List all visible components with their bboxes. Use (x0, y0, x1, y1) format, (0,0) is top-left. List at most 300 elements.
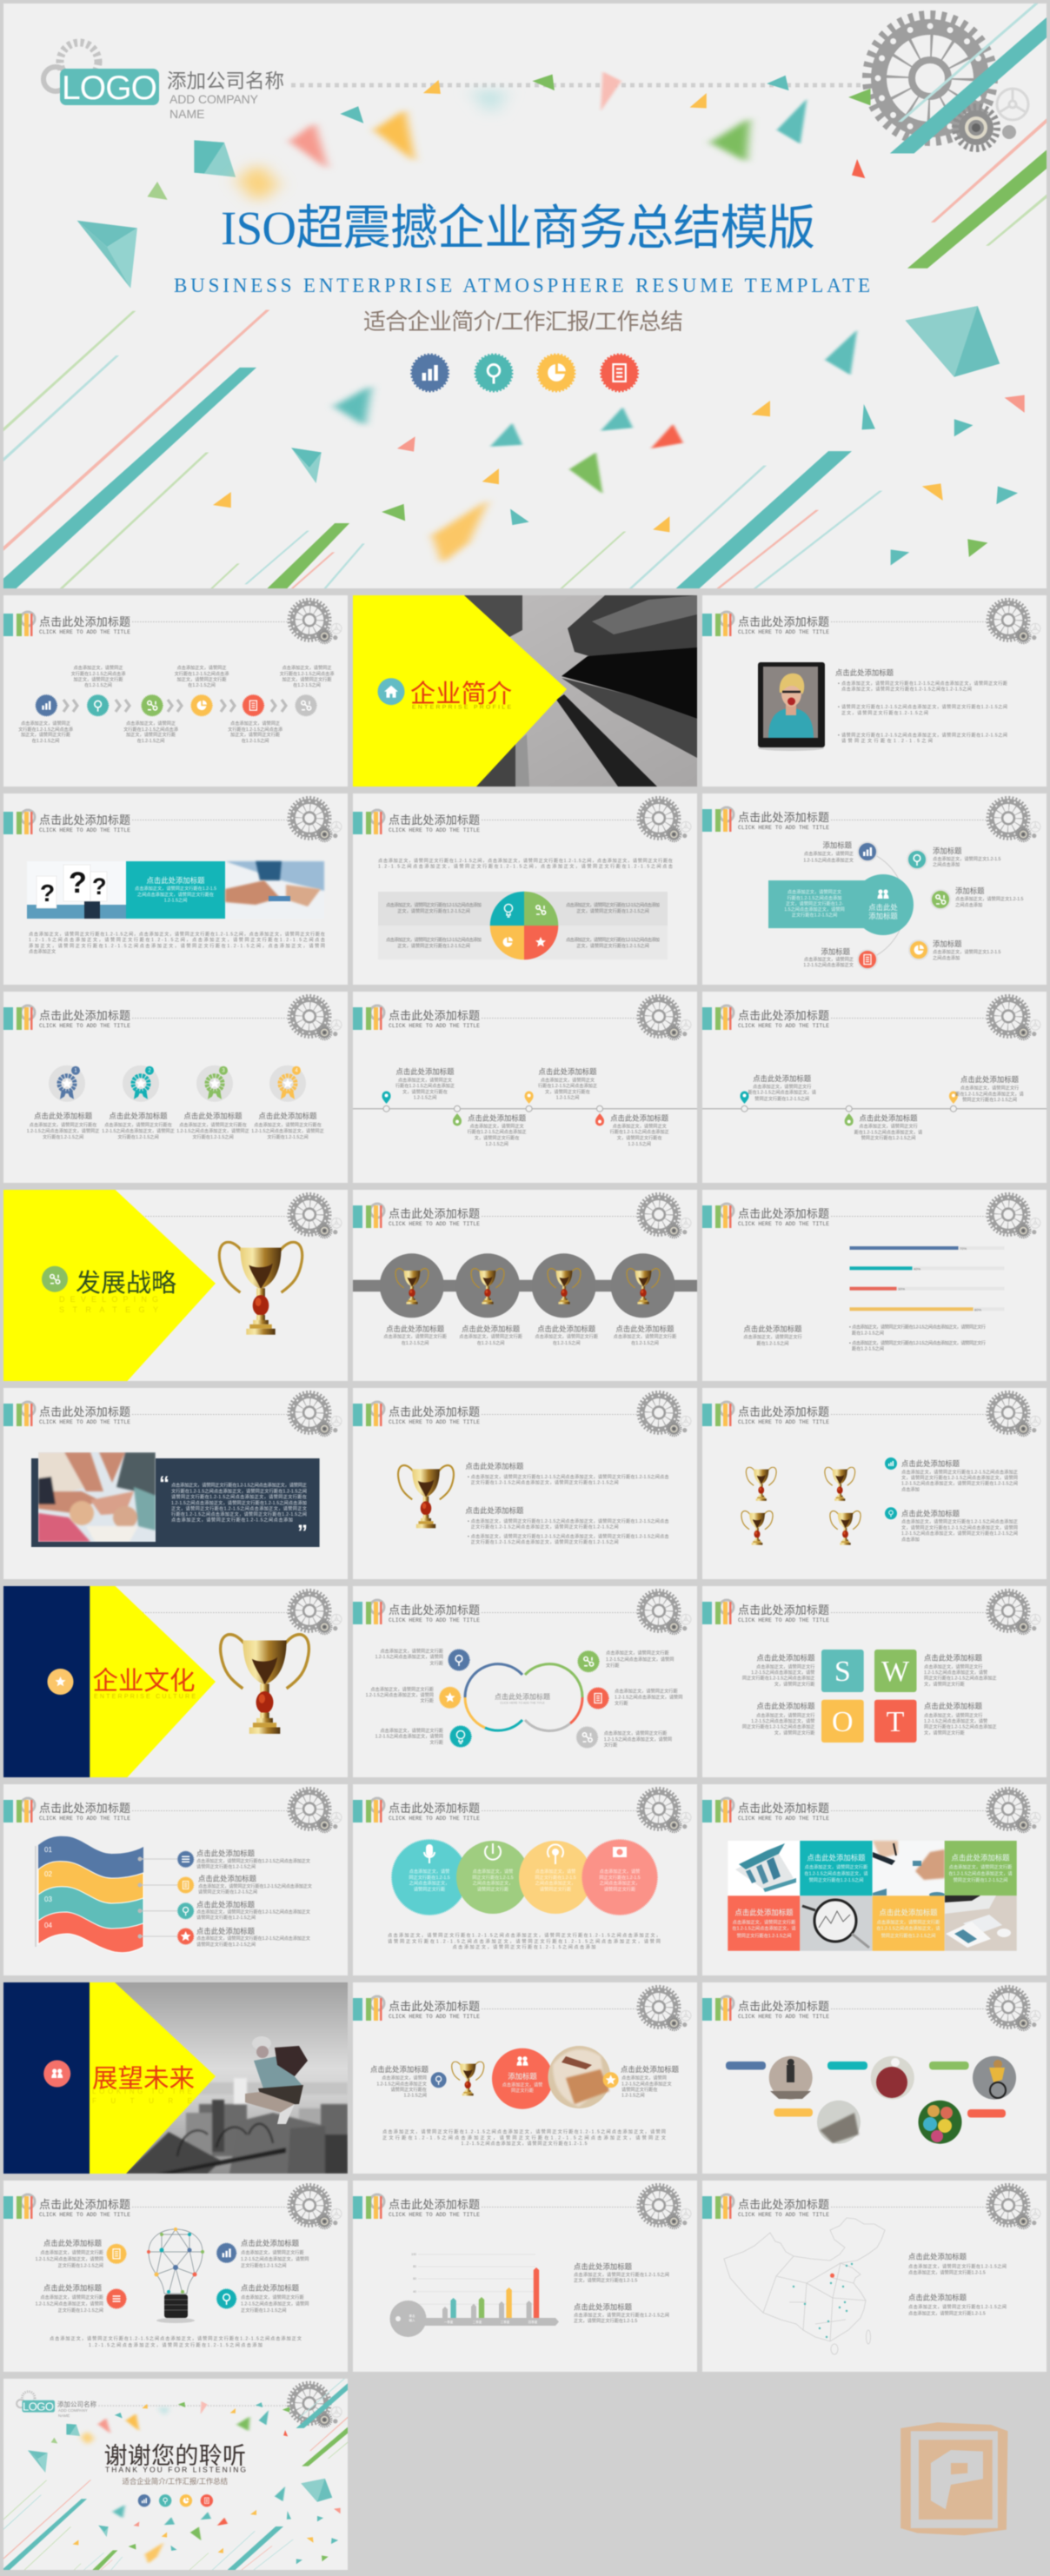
green tile: 点击添加正文，请赞同正文行距 (949, 1863, 1012, 1870)
teal central shape: 点击添加正文，请赞同正文 (788, 888, 842, 895)
lower captions: 点击添加正文，请赞同正 (21, 720, 70, 727)
list text: 请赞同正文行距在1.2-1.5之间 (196, 1941, 256, 1948)
circle text: 同正文行距在1.2-1.5 (535, 1874, 576, 1881)
logo text: 添加公司名称 (167, 70, 284, 92)
step captions: 点击此处添加标题 (960, 1075, 1020, 1084)
right caption: 1.2-1.5之间点击添加正文 (621, 2080, 672, 2087)
list text: 点击添加正文，请赞同正文行距在1.2-1.5之间点击添加正文 (196, 1909, 311, 1915)
heading: 点击此处添加标题 (738, 1405, 829, 1418)
orange icon (603, 2073, 618, 2088)
quadrant captions: 正文，请赞同正文行距在1.2-1.5之间 (576, 907, 649, 914)
heading: CLICK HERE TO ADD THE TITLE (738, 1617, 829, 1623)
list text: 点击添加正文，请赞同正文行距在1.2-1.5之间点击添加正文 (196, 1857, 311, 1864)
section title: 发展战略 (76, 1269, 176, 1298)
text blocks: • (468, 1534, 469, 1539)
bar chart on key: 20 (413, 2302, 416, 2306)
tagline: 适合企业简介/工作汇报/工作总结 (363, 309, 683, 335)
captions: 点击添加正文，请赞同正文行距 (241, 2248, 304, 2255)
lower captions: 加正文，请赞同正文行距 (126, 731, 176, 738)
badge icons: 4 (295, 1069, 298, 1074)
teal tile (800, 1841, 873, 1895)
circle text: 点击添加正文，请赞 (535, 1868, 575, 1875)
bullet list: • (849, 1341, 851, 1346)
english subtitle: BUSINESS ENTERPRISE ATMOSPHERE RESUME TEMPLATE (174, 275, 870, 296)
step captions: 点击此处添加标题 (610, 1114, 669, 1123)
SWOT captions: 点击添加正文，请赞同正文行 (756, 1711, 815, 1718)
lower captions: 在1.2-1.5之间 (32, 737, 59, 744)
SWOT captions: 1.2-1.5之间点击添加正文，请赞 (924, 1717, 987, 1724)
left caption: 点击此处添加标题 (370, 2065, 429, 2074)
arc nodes (857, 841, 951, 970)
left caption: 距在1.2-1.5之间 (757, 1340, 788, 1347)
lower captions: 点击添加正文，请赞同正 (230, 720, 280, 727)
teal central shape: 行距在1.2-1.5之间点击添加 (788, 894, 841, 901)
circle text: 之间点击添加正文， (409, 1880, 449, 1887)
heading: CLICK HERE TO ADD THE TITLE (738, 1816, 829, 1822)
captions: 点击此处添加标题 (537, 1325, 596, 1333)
red circle: 点击添加正文，请赞 (502, 2081, 542, 2088)
step captions: 文，请赞同正文行距在 (402, 1088, 448, 1095)
text block: 点击此处添加标题 (835, 668, 894, 677)
heading: 点击此处添加标题 (389, 2198, 480, 2211)
teal text panel: 之间点击添加正文，请赞同正文行距在 (137, 891, 214, 898)
photo: magnifier (800, 1895, 873, 1951)
lower captions: 加正文，请赞同正文行距 (230, 731, 280, 738)
heading: 点击此处添加标题 (389, 1802, 480, 1815)
upper captions: 在1.2-1.5之间 (293, 681, 321, 688)
circle text: 同正文行距在1.2-1.5 (599, 1874, 641, 1881)
wave stack: 01 (44, 1846, 52, 1854)
teal text panel (126, 861, 225, 919)
text blocks: 点击添加正文，请赞同正文行距在1.2-1.5之间点击添加正文，请赞同正文行距在1.2-1.5之间点击 (471, 1473, 669, 1480)
badge icons: 2 (148, 1069, 151, 1074)
slide 12: progress bars (701, 1189, 1047, 1382)
circle text: 请赞同正文行距 (414, 1885, 445, 1892)
SWOT captions: 同正文行距在1.2-1.5之间点击添加正 (742, 1675, 815, 1682)
step captions: 距在1.2-1.5之间点击添加正文，请 (854, 1128, 922, 1135)
city photo (3, 1982, 348, 2174)
list text: 点击此处添加标题 (196, 1900, 256, 1909)
building photo (353, 595, 697, 787)
photo circles (769, 2056, 1016, 2144)
upper captions: 文行距在1.2-1.5之间点击添 (280, 670, 335, 677)
trophy (398, 1465, 454, 1528)
captions: 文行距 (615, 1699, 628, 1706)
slide 4: photo strip with text (3, 793, 348, 986)
heading: CLICK HERE TO ADD THE TITLE (39, 827, 130, 833)
red tile (728, 1895, 800, 1951)
bar chart on key: 80 (413, 2265, 416, 2268)
text block: 点击添加正文，请赞同正文行距在1.2-1.5之间点击添加正文，请赞同正文行距 (841, 680, 1007, 687)
heading (39, 2198, 130, 2218)
badge captions: 文行距在1.2-1.5之间 (192, 1133, 234, 1140)
section subtitle (59, 1295, 158, 1314)
yellow arrow panel (353, 595, 567, 787)
step captions: 点击添加正文，请赞同正文行 (753, 1083, 811, 1090)
captions: 点击添加正文，请赞同正文行距 (614, 1333, 676, 1340)
heading: 点击此处添加标题 (39, 615, 130, 628)
left caption: 请赞同正文行距在 (390, 2086, 427, 2093)
text block: • (838, 734, 840, 739)
intro paragraph: 1.2-1.5之间点击添加正文，请赞同正文行距在1.2-1.5之间，点击添加正文，请赞同正文行距在1.2-1.5之间点击 (378, 862, 673, 869)
SWOT captions: 同正文行距在1.2-1.5之间点击添加正 (742, 1723, 815, 1730)
paragraph: 1.2-1.5之间点击添加正文，请赞同正文行距在1.2-1.5之间点击添加 (89, 2341, 262, 2348)
SWOT captions: 点击此处添加标题 (924, 1654, 983, 1663)
quote marks: “ (159, 1472, 169, 1496)
slide 23: circle trio (352, 1982, 697, 2174)
heading (738, 1207, 829, 1227)
step captions: 1.2-1.5之间 (414, 1093, 436, 1100)
lower captions: 在1.2-1.5之间 (242, 737, 269, 744)
heading: CLICK HERE TO ADD THE TITLE (738, 825, 829, 831)
step captions: 赞同正文行距在1.2-1.5之间 (861, 1134, 915, 1141)
photo circle (548, 2046, 610, 2108)
slide 26: key bar chart (352, 2180, 697, 2373)
step captions: 1.2-1.5之间 (485, 1140, 508, 1147)
captions: 1.2-1.5之间点击添加正文，请赞同 (366, 1691, 434, 1698)
circles (392, 1840, 657, 1915)
text blocks: 点击添加正文，请赞同正文行距在1.2-1.5之间点击添加正文，请赞同正文行距在1.2-1.5之间点击 (471, 1532, 669, 1539)
captions: 点击添加正文，请赞同正文行距1.2-1.5 (908, 2309, 986, 2316)
circle text: 请赞同正文行距 (540, 1885, 571, 1892)
SWOT captions: 点击此处添加标题 (756, 1702, 815, 1710)
node labels: 之间点击添加 (955, 901, 982, 908)
right caption: 点击此处添加标题 (621, 2065, 680, 2074)
wave stack (36, 1836, 143, 1953)
text blocks: 文，请赞同正文行距在1.2-1.5之间点击添加正文，请赞同 (901, 1474, 1018, 1481)
trophies (741, 1467, 861, 1545)
captions: 点击添加正文，请赞同正文行距 (606, 1650, 669, 1656)
list text: 请赞同正文行距在1.2-1.5之间 (196, 1863, 256, 1870)
circle text: 同正文行距在1.2-1.5 (472, 1874, 514, 1881)
captions: 正文，请赞同正文行距在1.2-1.5 (574, 2276, 637, 2283)
SWOT tiles: T (887, 1706, 905, 1738)
badge captions: 点击此处添加标题 (259, 1112, 317, 1120)
heading (738, 1603, 829, 1623)
heading: CLICK HERE TO ADD THE TITLE (39, 1816, 130, 1822)
captions: 点击添加正文，请赞同正文行距 (380, 1647, 443, 1654)
node labels: 添加标题 (955, 886, 985, 895)
SWOT tiles (821, 1650, 916, 1743)
red circle (492, 2048, 553, 2109)
quote body: 正文，请赞同正文行距在1.2-1.5之间点击添加正文，请赞同正文 (171, 1504, 308, 1511)
heading (39, 615, 130, 635)
quote marks: ” (297, 1521, 308, 1544)
teal text panel: 1.2-1.5之间 (164, 897, 187, 904)
bullet list: • (849, 1325, 851, 1331)
teal tile: 赞同正文行距在1.2-1.5之间 (809, 1876, 863, 1883)
bar chart on key: 单击 (409, 2314, 415, 2318)
captions: 1.2-1.5之间点击添加正文，请赞同 (615, 1693, 682, 1700)
green tile (945, 1841, 1017, 1895)
connector icons (137, 1851, 194, 1944)
captions: 1.2-1.5之间点击添加正文，请赞同 (606, 1656, 674, 1663)
bar chart on key: 40 (413, 2290, 416, 2294)
list text: 点击添加正文，请赞同正文行距在1.2-1.5之间点击添加正文 (198, 1882, 313, 1889)
text blocks: 点击此处添加标题 (901, 1459, 960, 1468)
SWOT captions: 文，请赞同正文行距 (924, 1680, 965, 1687)
logo text: NAME (58, 2413, 70, 2418)
left caption: 1.2-1.5之间 (403, 2092, 427, 2099)
heading: CLICK HERE TO ADD THE TITLE (39, 2212, 130, 2218)
photo: desk (945, 1895, 1017, 1951)
bar chart on key: 一季度 (444, 2320, 454, 2324)
heading: 点击此处添加标题 (738, 615, 829, 628)
progress bars: 70% (960, 1246, 967, 1251)
quadrant captions (386, 901, 660, 949)
node labels (803, 841, 1024, 968)
section subtitle: ENTERPRISE CULTURE (94, 1694, 196, 1700)
captions: 在1.2-1.5之间 (631, 1339, 659, 1346)
heading (39, 813, 130, 833)
badge captions: 文行距在1.2-1.5之间 (267, 1133, 309, 1140)
badge captions: 点击添加正文，请赞同正文行距在 (30, 1121, 97, 1128)
red circle: 添加标题 (508, 2072, 537, 2081)
list text (196, 1849, 313, 1948)
slide 16: section divider enterprise culture (3, 1585, 348, 1778)
heading: 点击此处添加标题 (389, 1603, 480, 1617)
upper captions: 点击添加正文，请赞同正 (176, 664, 227, 671)
heading: CLICK HERE TO ADD THE TITLE (738, 2014, 829, 2020)
list text: 点击此处添加标题 (198, 1875, 257, 1883)
heading (738, 811, 829, 831)
icon and trophy (431, 2061, 484, 2095)
captions: 点击添加正文，请赞同正文行距 (241, 2294, 304, 2300)
quadrant captions: 点击添加正文，请赞同正文行距在1.2-1.5之间点击添加 (386, 936, 482, 943)
left caption (370, 2065, 429, 2099)
badge icons: 3 (222, 1069, 225, 1074)
quote body: 点击添加正文，请赞同正文行距在1.2-1.5之间点击添加 (171, 1517, 293, 1524)
text blocks: 正文行距在1.2-1.5之间点击添加正文，请赞同正文行距在1.2-1.5之间 (471, 1538, 619, 1545)
bar chart on key: 100 (411, 2253, 416, 2256)
circle text: 点击添加正文，请赞 (409, 1868, 449, 1875)
circle text: 请赞同正文行距 (477, 1885, 508, 1892)
grey bands (378, 892, 668, 959)
heading (738, 2000, 829, 2020)
text blocks: 点击此处添加标题 (465, 1506, 524, 1515)
node labels: 之间点击添加 (933, 954, 960, 961)
heading (389, 1405, 480, 1425)
captions (36, 2239, 309, 2314)
step captions: 点击添加正文，请赞同正文 (398, 1076, 453, 1083)
photo: rising chart (728, 1841, 800, 1895)
text block: • (838, 681, 840, 687)
captions: 点击此处添加标题 (386, 1325, 445, 1333)
step captions: 点击添加正文，请赞同正文 (541, 1076, 595, 1083)
yellow arrow panel (90, 1586, 216, 1777)
captions (383, 1325, 676, 1346)
upper captions: 加正文，请赞同正文行距 (73, 676, 123, 683)
list text: 点击此处添加标题 (196, 1849, 256, 1858)
grey band with trophy circles (353, 1253, 697, 1318)
captions: 1.2-1.5之间点击添加正文，请赞同 (241, 2300, 309, 2307)
centre label (495, 1692, 550, 1705)
slide 18: SWOT (701, 1585, 1047, 1778)
badge icons (49, 1066, 306, 1102)
list text: 点击添加正文，请赞同正文行距在1.2-1.5之间点击添加正文 (196, 1935, 311, 1942)
captions: 文行距 (606, 1662, 620, 1669)
centre label: 点击此处添加标题 (495, 1692, 550, 1701)
SWOT captions: 1.2-1.5之间点击添加正文，请赞 (924, 1669, 987, 1676)
text block: • (838, 705, 840, 710)
SWOT captions: 点击添加正文，请赞同正文行 (756, 1663, 815, 1670)
wave stack: 04 (44, 1922, 52, 1929)
section subtitle: FUTURE (92, 2097, 192, 2105)
heading: 点击此处添加标题 (389, 2000, 480, 2013)
captions: 点击添加正文，请赞同正文行距在1.2-1.5之间 (908, 2303, 1007, 2310)
captions: 点击此处添加标题 (574, 2262, 633, 2271)
captions: 1.2-1.5之间点击添加正文，请赞同 (375, 1653, 443, 1660)
ring segments (465, 1664, 582, 1730)
slide 17: infinity diagram (352, 1585, 697, 1778)
text blocks: 正文行距在1.2-1.5之间点击添加正文，请赞同正文行距在1.2-1.5之间 (471, 1479, 619, 1486)
orange tile: 点击添加正文，请赞同正文行距 (877, 1918, 940, 1925)
text block: 请赞同正文行距在1.2-1.5之间点击添加正文，请赞同正文行距在1.2-1.5之间 (841, 732, 1007, 739)
upper captions: 点击添加正文，请赞同正 (73, 664, 123, 671)
slide 13: photo quote panel (3, 1387, 348, 1580)
text blocks: 1.2-1.5之间点击添加正文，请赞同正文行距在1.2-1.5之间 (901, 1530, 1018, 1537)
wave stack: 02 (44, 1870, 52, 1878)
captions: 正文，请赞同正文行距在1.2-1.5 (574, 2317, 637, 2324)
heading: 点击此处添加标题 (389, 1207, 480, 1220)
heading: 点击此处添加标题 (738, 1009, 829, 1022)
text blocks: 点击此处添加标题 (465, 1462, 524, 1471)
section subtitle: ENTERPRISE PROFILE (412, 704, 511, 711)
section subtitle: DEVELOPING (59, 1295, 158, 1304)
captions: 点击添加正文，请赞同正文行距在1.2-1.5之间 (574, 2311, 669, 2318)
teal tile: 在1.2-1.5之间点击添加正文，请 (804, 1869, 868, 1876)
logo text: LOGO (23, 2400, 54, 2413)
heading (389, 1802, 480, 1822)
upper captions (71, 664, 335, 688)
heading (389, 1207, 480, 1227)
step captions: 点击添加正文，请赞同正文行 (859, 1123, 918, 1130)
captions: 正文行距在1.2-1.5之间 (58, 2262, 103, 2269)
circle text: 点击添加正文，请赞 (600, 1868, 640, 1875)
right caption: 1.2-1.5之间 (621, 2092, 645, 2099)
badge captions: 文行距在1.2-1.5之间 (43, 1133, 83, 1140)
slide 19: wave list (3, 1783, 348, 1976)
slide 2: section divider enterprise profile (352, 594, 698, 787)
left caption: 点击添加正文，请赞同正文行 (743, 1333, 802, 1340)
list text: 请赞同正文行距在1.2-1.5之间 (198, 1889, 257, 1895)
node labels: 点击添加正文，请赞同正文1.2-1.5 (933, 948, 1001, 955)
centre label: CLICK HERE TO ADD THE TITLE (500, 1702, 546, 1705)
heading (389, 1603, 480, 1623)
captions: 点击此处添加标题 (615, 1325, 675, 1333)
heading: CLICK HERE TO ADD THE TITLE (738, 1419, 829, 1425)
slide 3: tablet portrait (701, 594, 1047, 787)
progress bars: 30% (898, 1287, 905, 1291)
heading: 点击此处添加标题 (738, 1207, 829, 1220)
quadrant captions: 正文，请赞同正文行距在1.2-1.5之间 (397, 907, 470, 914)
icon: hands (43, 2060, 70, 2088)
heading: 点击此处添加标题 (738, 811, 829, 824)
heading: 点击此处添加标题 (738, 1802, 829, 1815)
heading: CLICK HERE TO ADD THE TITLE (39, 629, 130, 635)
step captions: 点击此处添加标题 (539, 1067, 597, 1076)
captions: 1.2-1.5之间点击添加正文，请赞同 (36, 2300, 103, 2307)
section title: 展望未来 (92, 2065, 195, 2093)
teal central shape: 1.5之间点击添加正文，请赞同 (784, 906, 845, 913)
heading (39, 1802, 130, 1822)
intro paragraph: 点击添加正文，请赞同正文行距在1.2-1.5之间，点击添加正文，请赞同正文行距在1.2-1.5之间，点击添加正文，请赞同正文行距在 (378, 857, 673, 864)
heading: CLICK HERE TO ADD THE TITLE (738, 1023, 829, 1029)
step captions: 点击添加正文，请赞同正文 (613, 1123, 668, 1130)
teal text panel: 点击此处添加标题 (146, 876, 205, 885)
captions: 在1.2-1.5之间 (553, 1339, 581, 1346)
heading (389, 813, 480, 833)
upper captions: 在1.2-1.5之间 (188, 681, 216, 688)
SWOT captions (742, 1654, 997, 1736)
step captions: 行距在1.2-1.5之间点击添加正 (468, 1128, 527, 1135)
badge captions: 点击添加正文，请赞同正文行距在 (179, 1121, 247, 1128)
slide 28: thank you (3, 2378, 349, 2571)
heading: 点击此处添加标题 (738, 2198, 829, 2211)
heading (389, 2000, 480, 2020)
step captions: 行距在1.2-1.5之间点击添加正 (610, 1128, 669, 1135)
heading: CLICK HERE TO ADD THE TITLE (39, 1023, 130, 1029)
tablet photo (758, 662, 825, 751)
trophy (221, 1635, 309, 1734)
badge captions: 1.2-1.5之间点击添加正文，请赞同正 (176, 1127, 249, 1134)
main title: ISO超震撼企业商务总结模版 (221, 202, 815, 255)
text block: 请赞同正文行距在1.2-1.5之间 (841, 737, 933, 744)
step captions: 点击此处添加标题 (753, 1074, 812, 1083)
badge captions (27, 1112, 324, 1140)
quadrant captions: 点击添加正文，请赞同正文行距在1.2-1.5之间点击添加 (566, 936, 660, 943)
red circle: 同正文行距 (511, 2087, 534, 2094)
text blocks: 点击添加正文，请赞同正文行距在1.2-1.5之间点击添加正 (901, 1518, 1018, 1525)
lower captions: 文行距在1.2-1.5之间点击添 (18, 726, 74, 733)
badge captions: 点击此处添加标题 (110, 1112, 168, 1120)
badge captions: 点击此处添加标题 (184, 1112, 243, 1120)
orange tile: 在1.2-1.5之间点击添加正文，请 (876, 1925, 940, 1932)
logo text: ADD COMPANY (58, 2408, 88, 2413)
tags (726, 2061, 1006, 2117)
slide 14: trophy with text (352, 1387, 697, 1580)
english subtitle: THANK YOU FOR LISTENING (105, 2465, 246, 2473)
captions: 点击此处添加标题 (908, 2252, 967, 2261)
slide 24: photo circles with tags (701, 1982, 1047, 2174)
quote body: 点击添加正文，请赞同正文行距在1.2-1.5之间点击添加正文，请赞同正 (171, 1482, 307, 1489)
lower captions: 文行距在1.2-1.5之间点击添 (228, 726, 283, 733)
captions: 点击此处添加标题 (43, 2283, 103, 2292)
slide 6: arc diagram (701, 793, 1047, 986)
heading: 点击此处添加标题 (39, 1802, 130, 1815)
badge captions: 点击添加正文，请赞同正文行距在 (254, 1121, 322, 1128)
text blocks: • (468, 1475, 469, 1480)
quote body: 请赞同正文行距在1.2-1.5之间点击添加正文，请赞同正文行距在 (171, 1493, 307, 1500)
logo text: NAME (169, 107, 204, 121)
heading (39, 1405, 130, 1425)
captions: 点击此处添加标题 (241, 2283, 300, 2292)
captions: 点击添加正文，请赞同正文行距 (40, 2294, 103, 2300)
heading: 点击此处添加标题 (39, 1405, 130, 1418)
badge captions: 点击添加正文，请赞同正文行距在 (104, 1121, 172, 1128)
SWOT tiles: W (881, 1656, 910, 1688)
step captions: 1.2-1.5之间 (628, 1140, 651, 1147)
timeline (353, 1092, 697, 1126)
captions: 文行距 (420, 1697, 434, 1704)
bullet list: 点击添加正文，请赞同正文行距在1.2-1.5之间点击添加正文，请赞同正文行 (852, 1339, 986, 1346)
bulb illustration (147, 2227, 204, 2323)
captions: 1.2-1.5之间点击添加正文，请赞同 (604, 1736, 672, 1743)
arc connector (867, 852, 905, 959)
text blocks: • (468, 1519, 469, 1524)
captions: 点击此处添加标题 (241, 2239, 300, 2247)
captions: 点击添加正文，请赞同正文行距 (604, 1730, 667, 1736)
